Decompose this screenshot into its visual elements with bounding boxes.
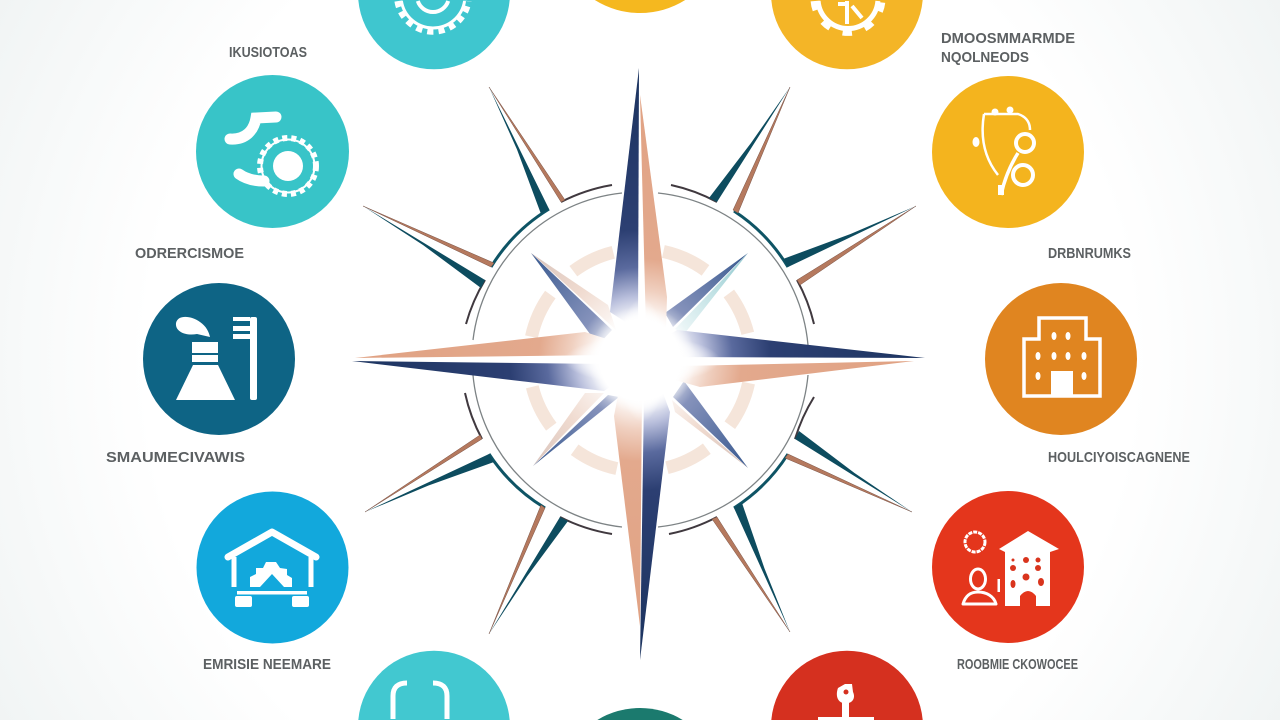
center glow (564, 298, 720, 422)
icon: flask and brush (176, 317, 257, 400)
node: top-right yellow gear (771, 0, 923, 69)
node: bottom center green (597, 708, 683, 720)
node: lower-left blue (196, 492, 348, 644)
label: top-right: NQOLNEODS (941, 49, 1029, 66)
label: right lower: HOULCIYOISCAGNENE (1048, 449, 1190, 466)
icon: gear with tool (815, 1, 881, 31)
icon: person and house (963, 531, 1059, 606)
label: left lower: SMAUMECIVAWIS (106, 449, 245, 466)
icon: gear (398, 1, 468, 31)
icon: pipes and gear (230, 117, 316, 194)
icon: branch and rings (972, 106, 1034, 195)
label: left upper: ODRERCISMOE (135, 245, 244, 262)
icon: building (1024, 318, 1100, 396)
label: top-right (941, 30, 1075, 66)
label: top-right: DMOOSMMARMDE (941, 30, 1075, 47)
node: left teal gear (196, 75, 349, 228)
node: right orange (985, 283, 1137, 435)
thin outer ring (473, 193, 808, 527)
outer rays: teal (363, 87, 916, 634)
label: top-left: IKUSIOTOAS (229, 44, 307, 61)
label: bottom-right: ROOBMIE CKOWOCEE (957, 656, 1078, 673)
node: top center yellow (595, 0, 685, 13)
diagonal star points (531, 253, 748, 468)
icon: valve (818, 684, 874, 720)
outer rays: peach (363, 87, 916, 634)
node: lower-right red (932, 491, 1084, 643)
compass rose (352, 68, 925, 660)
segmented arcs (489, 209, 788, 508)
node: top-left teal gear (358, 0, 510, 69)
main star points (352, 68, 925, 660)
icon: house with gear (228, 532, 316, 607)
node: bottom-right red (771, 651, 923, 720)
faint inner ring (508, 228, 772, 492)
node: left dark teal (143, 283, 295, 435)
icon: stethoscope (393, 683, 447, 719)
node: right yellow (932, 76, 1084, 228)
node: bottom-left teal (358, 651, 510, 720)
label: right upper: DRBNRUMKS (1048, 245, 1131, 262)
label: bottom-left: EMRISIE NEEMARE (203, 656, 331, 673)
